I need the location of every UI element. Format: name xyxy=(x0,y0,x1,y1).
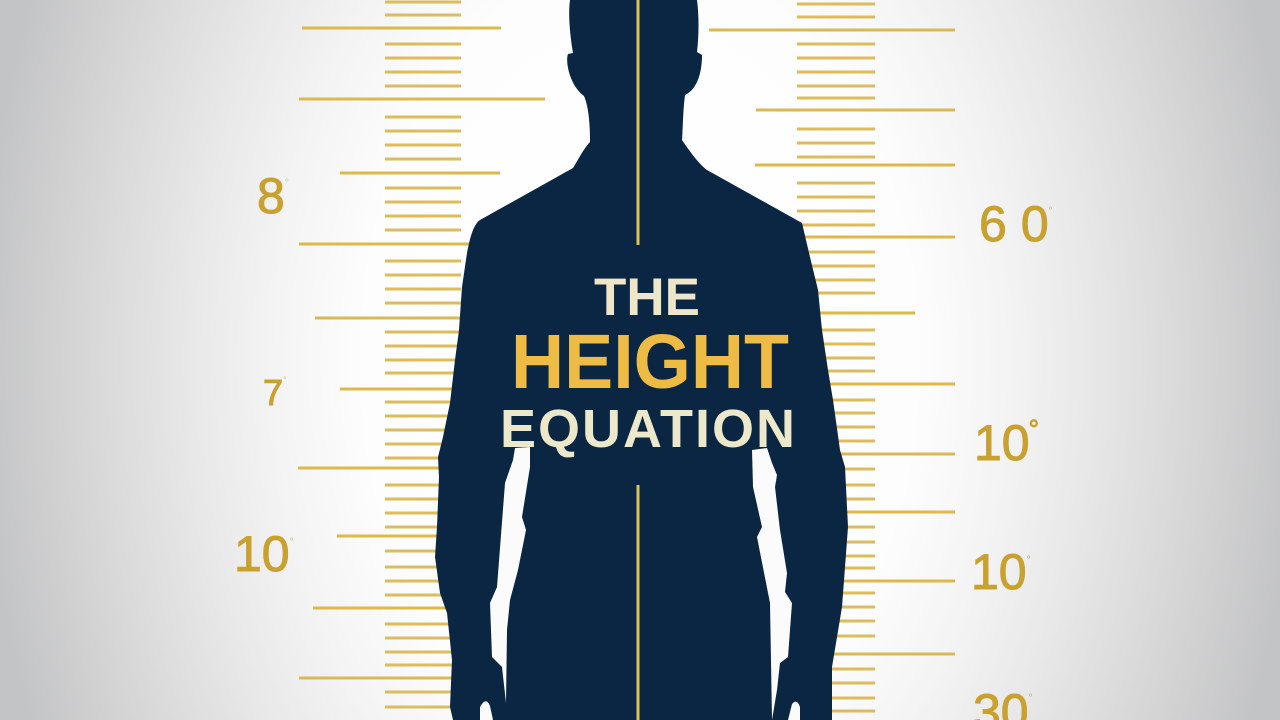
label: 10 upper: 10 xyxy=(974,415,1030,471)
label: 8: 8 xyxy=(257,168,285,224)
left ruler minor ticks xyxy=(385,2,461,707)
title word: HEIGHT: HEIGHT xyxy=(511,319,789,405)
label: 8: ° xyxy=(285,178,289,189)
label: 10 lower: 10 xyxy=(971,544,1027,600)
left scale labels xyxy=(234,168,294,582)
title xyxy=(500,268,795,459)
gap between right arm and torso xyxy=(752,448,792,720)
label: 10 lower: ° xyxy=(1027,555,1031,566)
left ruler major ticks xyxy=(298,28,545,678)
label: 60: ° xyxy=(1049,206,1053,217)
left hand notch xyxy=(480,701,493,720)
label: 60: 6 0 xyxy=(979,196,1049,252)
centre measuring line xyxy=(636,0,640,720)
silhouette of a man xyxy=(435,0,848,720)
title word: EQUATION: EQUATION xyxy=(500,399,795,459)
label: 10: ° xyxy=(290,537,294,548)
title word: THE: THE xyxy=(594,268,700,327)
figure body xyxy=(435,0,848,720)
right scale labels xyxy=(971,196,1053,720)
label: 7: ° xyxy=(283,375,287,385)
right ruler xyxy=(709,4,955,711)
gap between left arm and torso xyxy=(490,447,530,703)
right ruler minor ticks xyxy=(797,4,875,711)
right ruler major ticks xyxy=(709,30,955,654)
left ruler xyxy=(298,2,545,707)
label: 30: ° xyxy=(1029,693,1033,704)
right hand notch xyxy=(788,702,800,720)
label: 7: 7 xyxy=(263,372,283,413)
label: 10: 10 xyxy=(234,526,290,582)
label: 10 upper: ° xyxy=(1029,414,1039,444)
